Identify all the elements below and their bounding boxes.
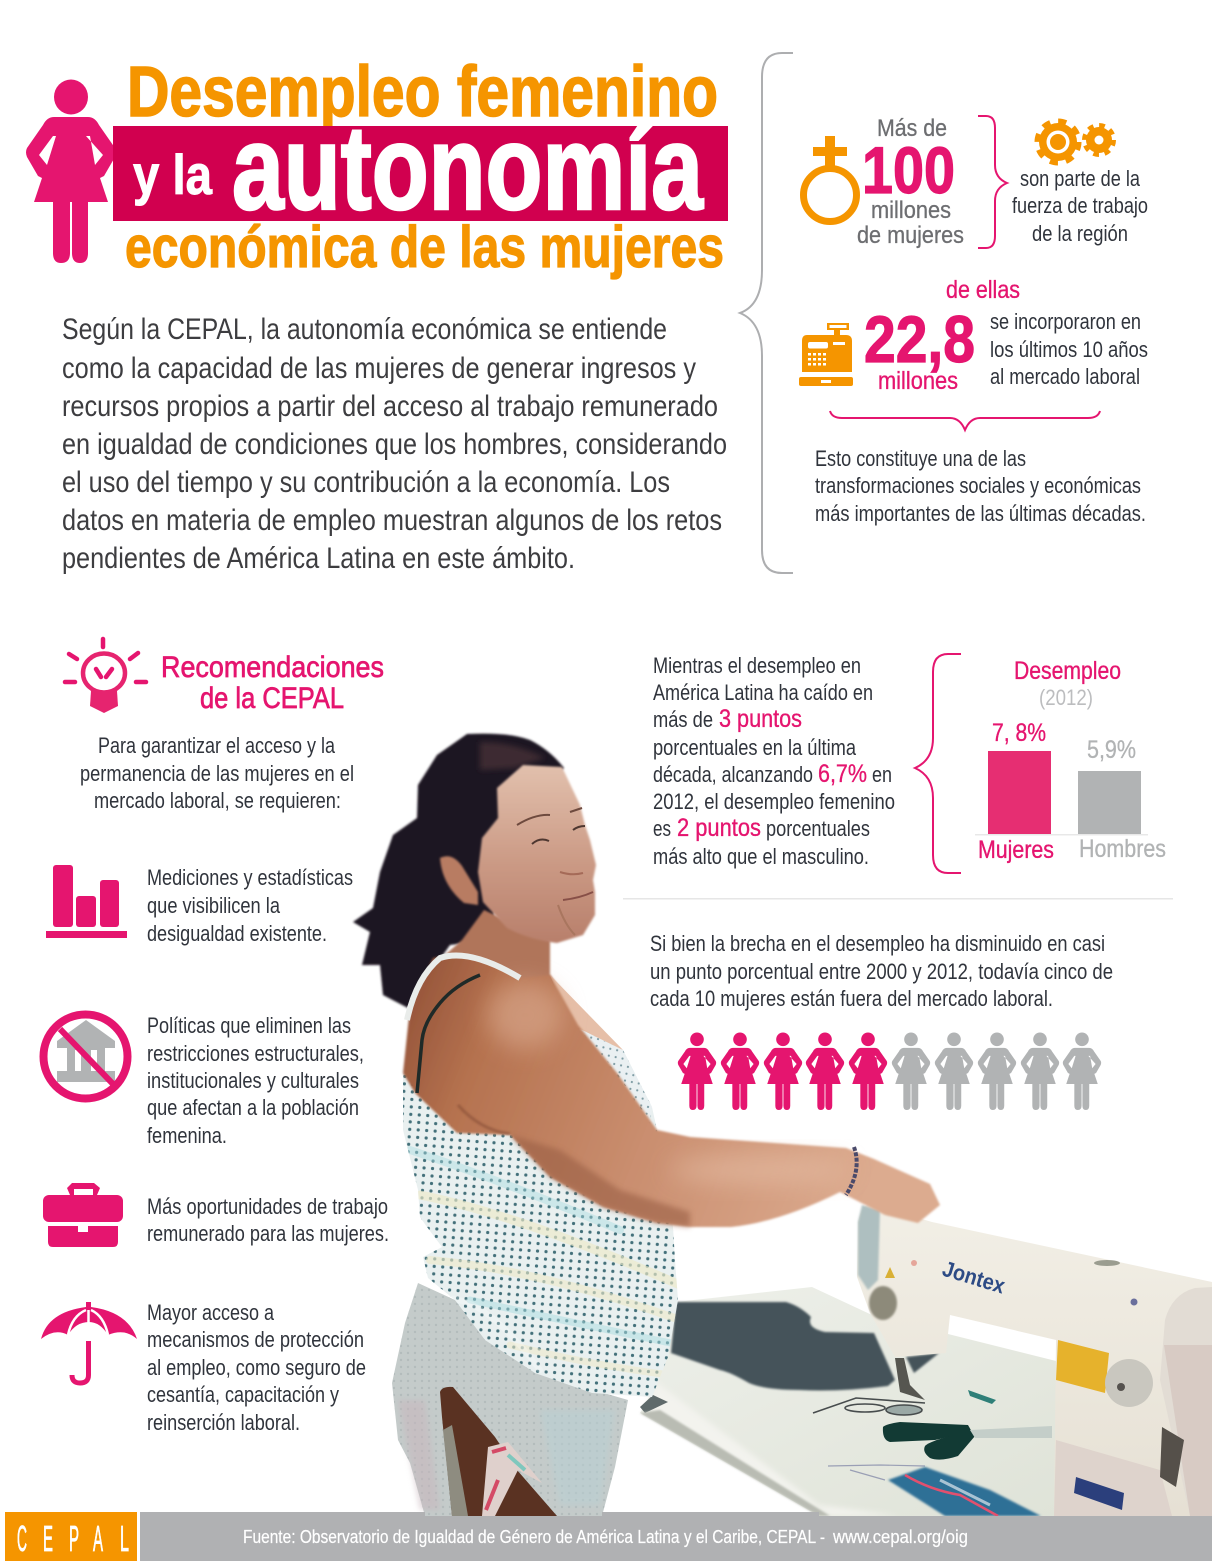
intro paragraph: Según la CEPAL, la autonomía económica se entiende bbox=[62, 313, 667, 346]
dark slot bbox=[1160, 1427, 1184, 1487]
unemployment text block: década, alcanzando bbox=[653, 762, 813, 787]
pink brace: chart bbox=[915, 654, 961, 873]
tank bands bbox=[410, 1150, 680, 1375]
chrome plate bbox=[858, 1205, 880, 1290]
chair grey strip bbox=[443, 1425, 468, 1516]
item text: oportunidades: Más oportunidades de trabajo bbox=[147, 1194, 388, 1219]
chair bbox=[440, 1387, 557, 1516]
millones pink label: millones bbox=[878, 367, 958, 395]
face bbox=[478, 765, 596, 943]
bracelet bbox=[846, 1147, 857, 1195]
item text: politicas: femenina. bbox=[147, 1123, 227, 1148]
incorporation text: se incorporaron en bbox=[990, 309, 1141, 334]
heading bbox=[161, 651, 384, 715]
woman bbox=[353, 734, 940, 1516]
chart baseline bbox=[975, 834, 1148, 836]
label: hombres: Hombres bbox=[1079, 835, 1166, 863]
item text: proteccion: Mayor acceso a bbox=[147, 1300, 275, 1325]
icon: barred bank bbox=[44, 1014, 128, 1098]
bar chart: unemployment 2012 bbox=[975, 657, 1166, 864]
chart title: Desempleo bbox=[1014, 657, 1121, 685]
lead text bbox=[80, 733, 354, 813]
unemployment text block: es bbox=[653, 816, 671, 841]
unemployment text block: en bbox=[872, 762, 892, 787]
CEPAL logo: C bbox=[17, 1518, 27, 1559]
pillar shadow bbox=[1160, 1287, 1212, 1516]
intro paragraph: como la capacidad de las mujeres de generar ingresos y bbox=[62, 352, 696, 385]
icon: venus symbol bbox=[804, 136, 856, 222]
gap text block bbox=[650, 931, 1113, 1011]
item text: mediciones bbox=[147, 865, 353, 946]
unemployment text block: porcentuales en la última bbox=[653, 735, 857, 760]
title bbox=[113, 53, 728, 280]
item text: politicas: que afectan a la población bbox=[147, 1095, 359, 1120]
workforce text: de la región bbox=[1032, 221, 1128, 246]
unemployment text block: Mientras el desempleo en bbox=[653, 653, 861, 678]
lead text: mercado laboral, se requieren: bbox=[94, 788, 341, 813]
grey brace bbox=[740, 53, 793, 573]
title big word: autonomía bbox=[232, 101, 704, 235]
unemployment text block: más de bbox=[653, 707, 713, 732]
item text: politicas: Políticas que eliminen las bbox=[147, 1013, 351, 1038]
item text: politicas: institucionales y culturales bbox=[147, 1068, 359, 1093]
facial features bbox=[517, 808, 593, 935]
source band bbox=[140, 1516, 1212, 1561]
icon: gears bbox=[1038, 122, 1114, 162]
item text: proteccion: cesantía, capacitación y bbox=[147, 1382, 339, 1407]
incorporation text: los últimos 10 años bbox=[990, 337, 1148, 362]
item text: proteccion bbox=[147, 1300, 366, 1435]
knob bbox=[1105, 1359, 1153, 1407]
title line 1: Desempleo femenino bbox=[127, 53, 718, 132]
chart year: (2012) bbox=[1039, 685, 1093, 710]
gap text block: Si bien la brecha en el desempleo ha disminuido en casi bbox=[650, 931, 1105, 956]
tank strap bbox=[407, 956, 520, 1020]
warning triangle bbox=[885, 1267, 895, 1278]
item text: oportunidades bbox=[147, 1194, 389, 1246]
number 100: 100 bbox=[862, 133, 955, 207]
gap text block: un punto porcentual entre 2000 y 2012, todavía cinco de bbox=[650, 959, 1113, 984]
item text: proteccion: al empleo, como seguro de bbox=[147, 1355, 366, 1380]
underarm shadow bbox=[510, 1135, 690, 1227]
pink brace bbox=[978, 116, 1007, 248]
icon: cash register bbox=[799, 323, 853, 386]
workforce text: son parte de la bbox=[1020, 166, 1141, 191]
chest skin bbox=[550, 975, 623, 1050]
footer bbox=[5, 1512, 1212, 1561]
unemployment text block: 3 puntos bbox=[719, 705, 802, 733]
icon: woman figure bbox=[26, 80, 116, 263]
gap text block: cada 10 mujeres están fuera del mercado laboral. bbox=[650, 986, 1053, 1011]
incorporation text bbox=[990, 309, 1148, 389]
title small words: y la bbox=[133, 143, 213, 206]
heading: de la CEPAL bbox=[200, 682, 344, 715]
bra strap bbox=[417, 975, 480, 1093]
hair bbox=[353, 734, 564, 1008]
mechanism bbox=[869, 1286, 897, 1320]
dark fabric bbox=[671, 1302, 939, 1390]
value: mujeres: 7, 8% bbox=[992, 719, 1046, 747]
machine arm bbox=[857, 1204, 1212, 1516]
blue cloth bbox=[888, 1467, 1041, 1516]
icon: lightbulb bbox=[65, 639, 146, 713]
CEPAL logo bbox=[5, 1512, 137, 1561]
number 22,8: 22,8 bbox=[864, 302, 975, 376]
intro paragraph: el uso del tiempo y su contribución a la economía. Los bbox=[62, 466, 670, 499]
horizontal brace bbox=[830, 411, 1100, 430]
intro paragraph: en igualdad de condiciones que los hombres, considerando bbox=[62, 428, 727, 461]
source text: www.cepal.org/oig bbox=[832, 1527, 968, 1547]
tank top bbox=[403, 1028, 680, 1397]
item text: mediciones: desigualdad existente. bbox=[147, 921, 327, 946]
intro paragraph bbox=[62, 313, 727, 575]
teal slot bbox=[968, 1390, 996, 1404]
unemployment text block: porcentuales bbox=[766, 816, 870, 841]
millones label: millones bbox=[871, 197, 951, 224]
tank chest strip bbox=[578, 1028, 652, 1120]
top knob bbox=[1094, 1260, 1120, 1266]
title band bbox=[113, 126, 728, 221]
item text: proteccion: reinserción laboral. bbox=[147, 1410, 300, 1435]
CEPAL logo: E bbox=[43, 1518, 53, 1559]
shoulder highlight bbox=[487, 981, 563, 1049]
value: hombres: 5,9% bbox=[1087, 736, 1136, 764]
heading: Recomendaciones bbox=[161, 651, 384, 684]
source text: Fuente: Observatorio de Igualdad de Género de América Latina y el Caribe, CEPAL - bbox=[243, 1527, 825, 1547]
cloth on chair bbox=[482, 1442, 542, 1516]
title line 3: económica de las mujeres bbox=[125, 215, 724, 280]
panel: recommendations bbox=[41, 639, 389, 1435]
needle bbox=[895, 1358, 925, 1400]
logo: Jontex bbox=[940, 1256, 1009, 1299]
item text: oportunidades: remunerado para las mujeres. bbox=[147, 1221, 389, 1246]
ear bbox=[440, 856, 478, 905]
badge plate bbox=[1074, 1477, 1124, 1510]
bar: mujeres bbox=[988, 751, 1051, 834]
workforce text bbox=[1012, 166, 1148, 246]
incorporation text: al mercado laboral bbox=[990, 364, 1140, 389]
transformation text bbox=[815, 446, 1146, 526]
CEPAL logo: L bbox=[120, 1518, 129, 1559]
lead text: Para garantizar el acceso y la bbox=[98, 733, 336, 758]
pants bbox=[392, 1283, 628, 1516]
mas de label: Más de bbox=[877, 115, 947, 142]
grey figures bbox=[892, 1033, 1101, 1110]
scissors bbox=[883, 1422, 1052, 1460]
icon: briefcase bbox=[43, 1183, 123, 1247]
icon: umbrella bbox=[41, 1302, 137, 1383]
panel: 22,8 millones bbox=[799, 276, 1148, 526]
transformation text: transformaciones sociales y económicas bbox=[815, 473, 1141, 498]
unemployment text block: más alto que el masculino. bbox=[653, 844, 869, 869]
table bbox=[640, 1287, 1060, 1516]
intro paragraph: recursos propios a partir del acceso al trabajo remunerado bbox=[62, 390, 718, 423]
unemployment text block: 6,7% bbox=[818, 760, 867, 788]
transformation text: Esto constituye una de las bbox=[815, 446, 1026, 471]
transformation text: más importantes de las últimas décadas. bbox=[815, 501, 1146, 526]
icon: bar chart bbox=[46, 865, 127, 938]
unemployment text block: 2 puntos bbox=[677, 814, 761, 842]
machine bbox=[857, 1204, 1212, 1516]
workforce text: fuerza de trabajo bbox=[1012, 193, 1148, 218]
glasses bbox=[813, 1398, 925, 1415]
armpit crease bbox=[458, 1105, 510, 1134]
unemployment text block bbox=[653, 653, 895, 869]
warning label bbox=[1056, 1340, 1109, 1393]
item text: proteccion: mecanismos de protección bbox=[147, 1327, 364, 1352]
item text: politicas: restricciones estructurales, bbox=[147, 1041, 364, 1066]
photo: woman at sewing machine bbox=[353, 734, 1212, 1516]
label: mujeres: Mujeres bbox=[978, 836, 1054, 864]
item text: politicas bbox=[147, 1013, 364, 1148]
lead text: permanencia de las mujeres en el bbox=[80, 761, 354, 786]
intro paragraph: datos en materia de empleo muestran algunos de los retos bbox=[62, 504, 722, 537]
arm and shoulder bbox=[403, 956, 940, 1227]
CEPAL logo: A bbox=[93, 1518, 103, 1559]
panel: 100 millones bbox=[804, 115, 1148, 249]
item text: mediciones: que visibilicen la bbox=[147, 893, 281, 918]
intro paragraph: pendientes de América Latina en este ámbito. bbox=[62, 542, 575, 575]
de ellas label: de ellas bbox=[946, 276, 1020, 304]
pink figures bbox=[678, 1033, 887, 1110]
bar: hombres bbox=[1078, 771, 1141, 834]
unemployment text block: América Latina ha caído en bbox=[653, 680, 873, 705]
pictogram: 5 of 10 women bbox=[678, 1033, 1101, 1110]
threads bbox=[828, 1465, 925, 1480]
forearm highlight bbox=[670, 1156, 850, 1184]
CEPAL logo: P bbox=[69, 1518, 79, 1559]
unemployment text block: 2012, el desempleo femenino bbox=[653, 789, 895, 814]
neck bbox=[445, 910, 590, 1025]
de mujeres label: de mujeres bbox=[857, 222, 964, 249]
item text: mediciones: Mediciones y estadísticas bbox=[147, 865, 353, 890]
